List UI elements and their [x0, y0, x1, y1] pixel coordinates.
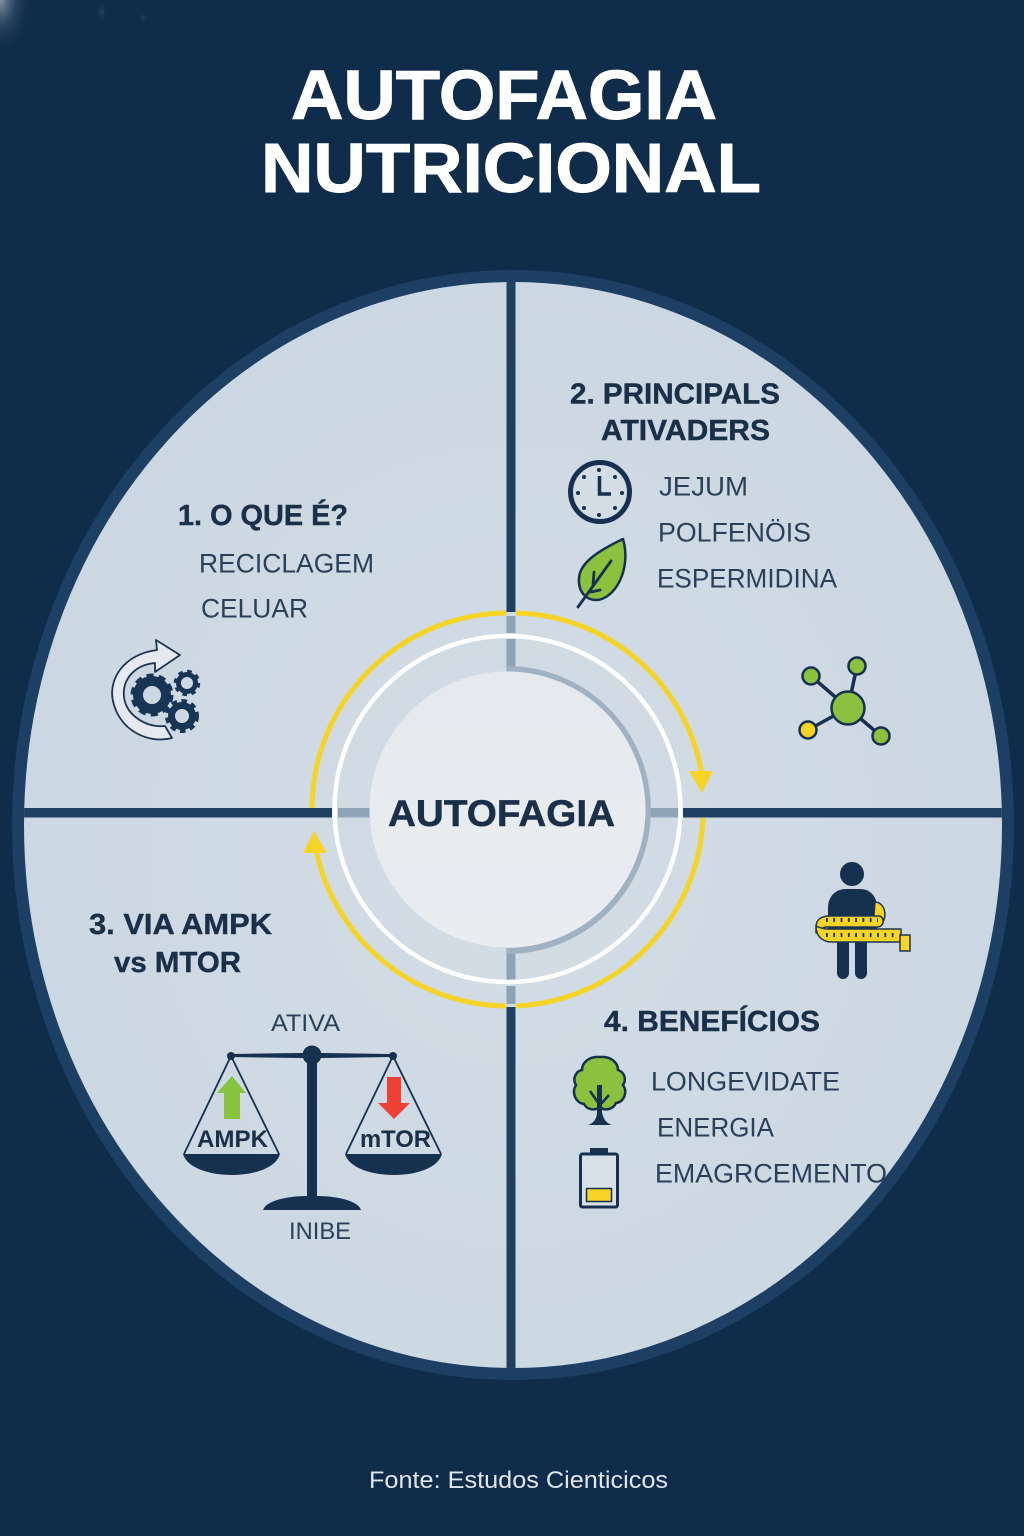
list: activators — [657, 472, 837, 594]
circular diagram panel — [14, 270, 1013, 1377]
list: activators: JEJUM — [659, 472, 748, 502]
icon: molecule — [800, 658, 890, 744]
panel 3: via ampk vs mtor — [89, 909, 442, 1245]
list: benefits: EMAGRCEMENTO — [655, 1158, 887, 1188]
title — [261, 56, 761, 207]
panel 2: principais ativadores — [570, 378, 890, 744]
label: inibe: INIBE — [289, 1218, 351, 1245]
heading 3: 3. VIA AMPK — [89, 909, 272, 941]
icon: balance scale — [183, 1046, 442, 1210]
white ring — [334, 636, 680, 982]
yellow cycle arrow: top to right — [312, 613, 713, 808]
inner arc shadow — [507, 669, 648, 951]
list: benefits: ENERGIA — [657, 1112, 774, 1142]
icon: person with tape — [816, 862, 910, 979]
heading 4: 4. BENEFÍCIOS — [604, 1004, 820, 1038]
heading 1: 1. O QUE É? — [178, 498, 348, 532]
hub disc — [370, 672, 646, 948]
icon: leaf — [578, 539, 625, 607]
icon: recycling gears — [112, 640, 198, 740]
heading 2: ATIVADERS — [601, 415, 770, 447]
icon: battery — [580, 1148, 618, 1207]
quadrant dividers — [14, 270, 1013, 1377]
icon: tree — [574, 1057, 625, 1125]
hub label: AUTOFAGIA — [388, 793, 615, 834]
heading 3: vs MTOR — [114, 947, 241, 979]
panel 1: o que é — [112, 498, 374, 740]
scale labels — [197, 1126, 431, 1153]
scale labels: mTOR — [360, 1126, 431, 1153]
yellow cycle arrow: bottom to left — [303, 818, 703, 1006]
panel 4: benefícios — [574, 862, 910, 1207]
text: reciclagem celular: RECICLAGEM — [199, 548, 374, 578]
scale labels: AMPK — [197, 1126, 269, 1153]
source footer: Fonte: Estudos Cienticicos — [369, 1467, 668, 1494]
text: reciclagem celular: CELUAR — [201, 594, 308, 624]
central hub — [303, 613, 713, 1006]
arrow: up green — [217, 1076, 246, 1119]
list: activators: POLFENÖIS — [658, 518, 811, 548]
title: AUTOFAGIA — [291, 56, 717, 134]
heading 3 — [89, 909, 272, 979]
list: benefits — [651, 1066, 887, 1188]
arrow: down red — [378, 1077, 410, 1119]
hub connector lines — [338, 616, 679, 1004]
list: benefits: LONGEVIDATE — [651, 1066, 840, 1096]
heading 2: 2. PRINCIPALS — [570, 378, 780, 410]
icon: clock — [570, 462, 630, 522]
text: reciclagem celular — [199, 548, 374, 624]
list: activators: ESPERMIDINA — [657, 564, 837, 594]
label: ativa: ATIVA — [271, 1010, 340, 1037]
title: NUTRICIONAL — [261, 129, 761, 207]
heading 2 — [570, 378, 780, 447]
